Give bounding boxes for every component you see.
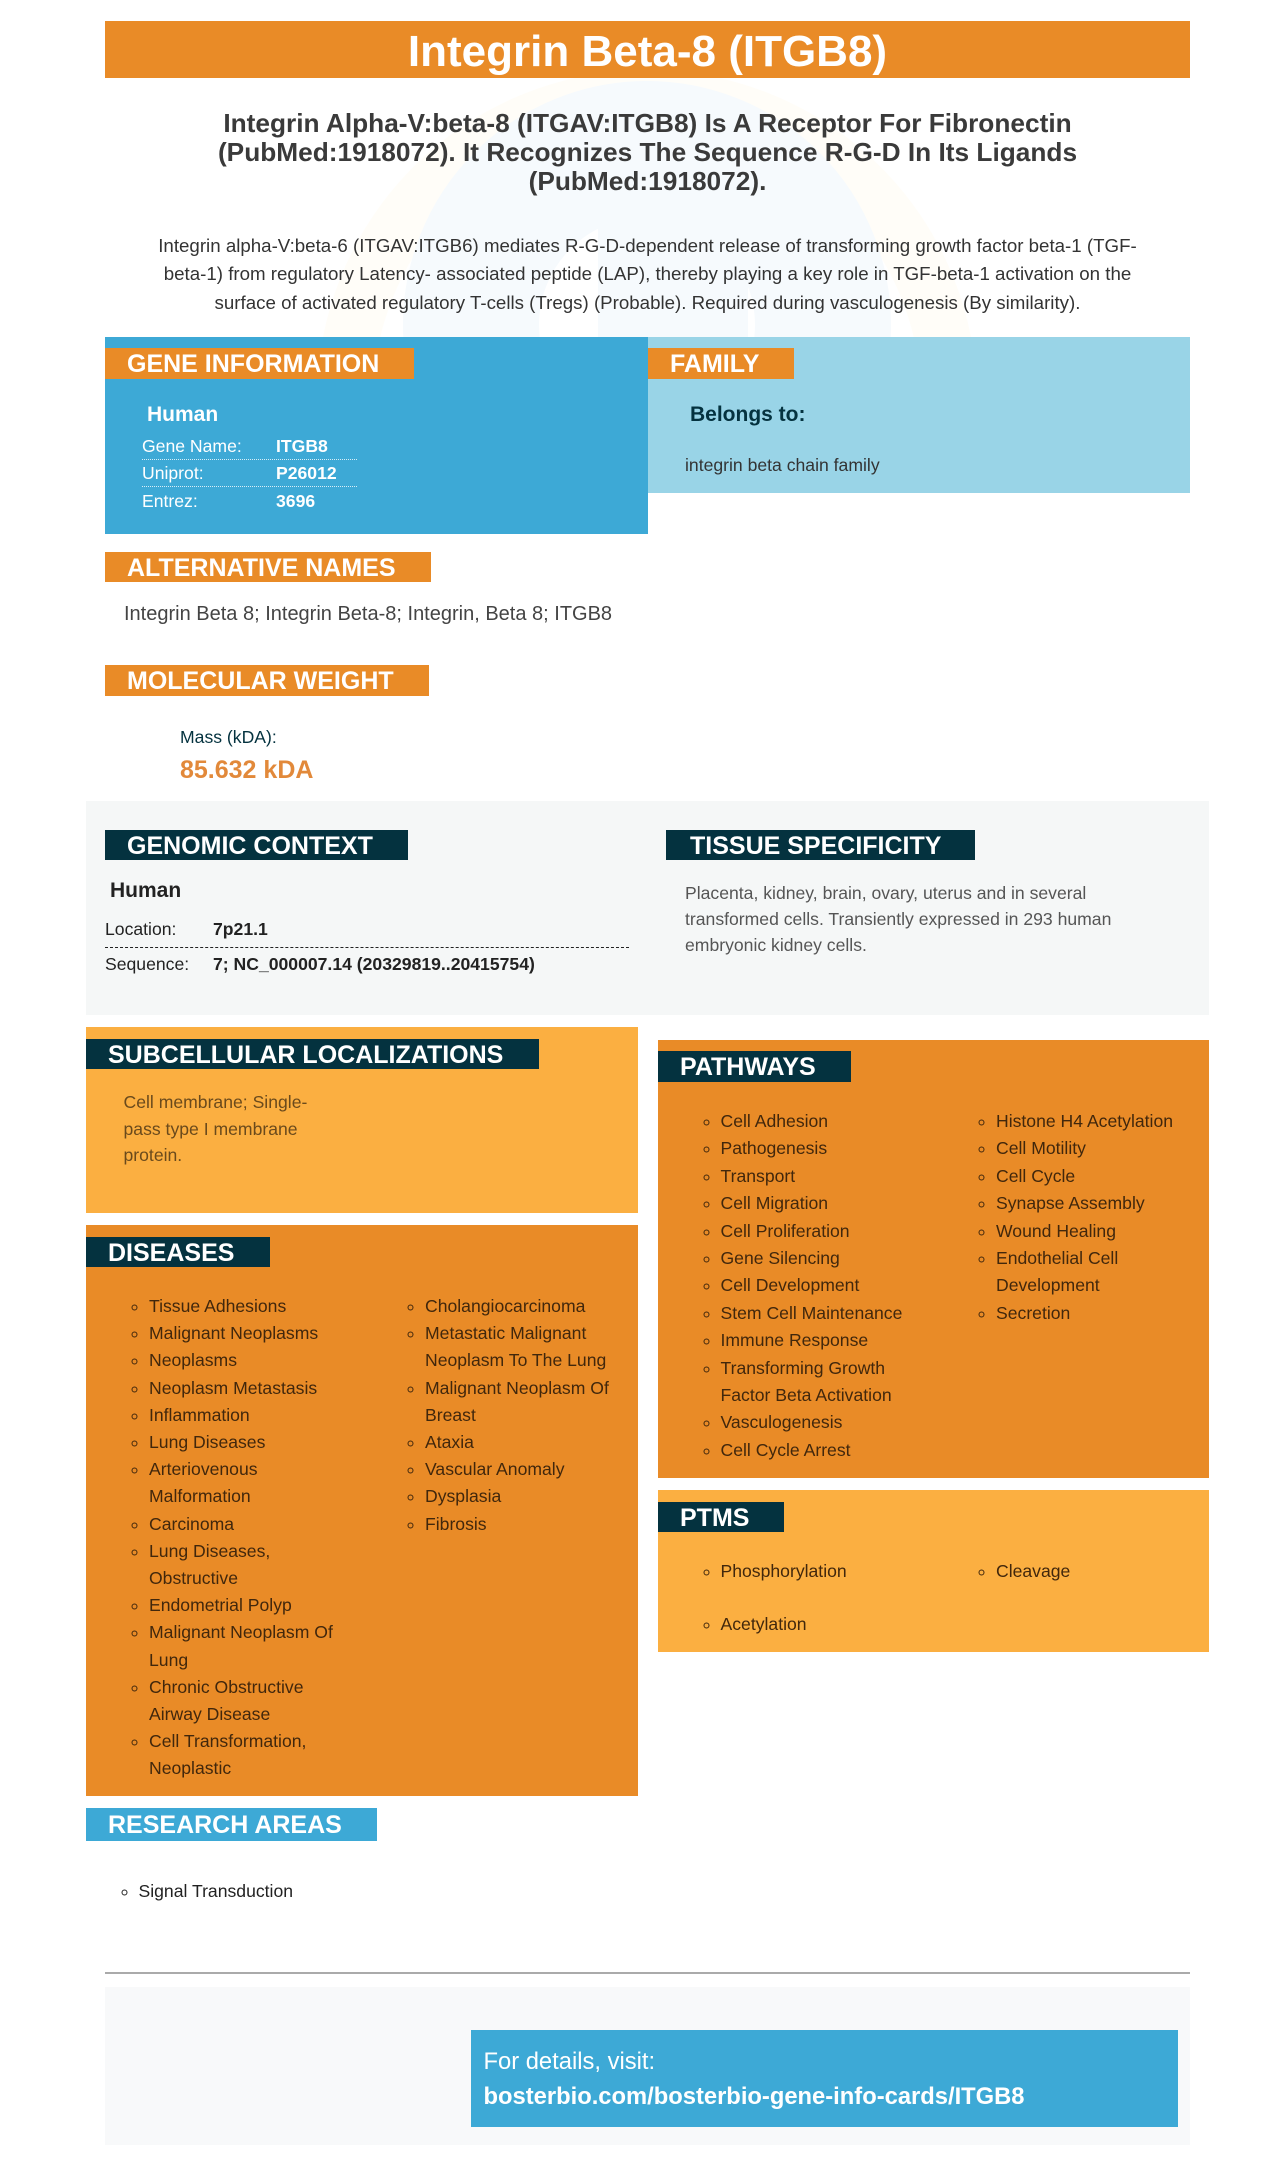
pathways list column 1: Cell Cycle Arrest [720,1440,851,1460]
diseases list column 2: Metastatic Malignant [425,1323,586,1343]
panel: ptms [658,1490,1209,1652]
subcellular text [124,1092,307,1165]
diseases list column 2: Cholangiocarcinoma [425,1296,585,1316]
background watermark logo [403,81,891,337]
panel: alternative names [105,552,612,625]
subtitle heading [218,108,1077,196]
pathways list column 1: Transport [720,1166,795,1186]
diseases list column 1: Obstructive [149,1568,238,1588]
sequence row: Sequence: [105,954,189,974]
pathways list column 1: Cell Proliferation [720,1221,850,1241]
title banner: Integrin Beta-8 (ITGB8) [408,27,887,76]
diseases list column 1: Neoplasms [149,1350,237,1370]
pathways list column 2: Endothelial Cell [996,1248,1118,1268]
heading: genomic context: GENOMIC CONTEXT [127,832,373,860]
heading: molecular weight: MOLECULAR WEIGHT [127,667,394,695]
diseases list column 1: Malformation [149,1486,251,1506]
species label: Human [110,879,181,902]
heading: ptms: PTMS [680,1504,749,1532]
diseases list column 1: Carcinoma [149,1514,234,1534]
pathways list column 1: Cell Adhesion [720,1111,828,1131]
diseases list column 2: Fibrosis [425,1514,487,1534]
pathways list column 1: Cell Migration [720,1193,828,1213]
panel: family [648,337,1190,493]
heading: diseases [86,1237,270,1267]
subcellular text: pass type I membrane [124,1119,298,1139]
pathways list column 1: Pathogenesis [720,1138,827,1158]
title banner [105,21,1190,78]
diseases list column 1: Chronic Obstructive [149,1677,304,1697]
diseases list column 1: Arteriovenous [149,1459,258,1479]
diseases list column 2 [408,1296,609,1534]
pathways list column 1: Gene Silencing [720,1248,840,1268]
panel: diseases [86,1225,638,1796]
sequence row: 7; NC_000007.14 (20329819..20415754) [213,954,535,974]
panel: molecular weight [105,665,429,784]
panel: pathways [658,1040,1209,1478]
pathways list column 2: Histone H4 Acetylation [996,1111,1173,1131]
tissue specificity text: embryonic kidney cells. [685,935,867,955]
belongs to label: Belongs to: [690,403,806,426]
tissue specificity text: Placenta, kidney, brain, ovary, uterus and in several [685,883,1086,903]
heading: diseases: DISEASES [108,1239,234,1267]
gene name row: Gene Name: [142,436,242,456]
diseases list column 1: Lung Diseases, [149,1541,270,1561]
panel: research areas [86,1808,377,1901]
entrez row: 3696 [276,491,315,511]
entrez row: Entrez: [142,491,198,511]
research areas list: Signal Transduction [138,1881,293,1901]
heading: research areas [86,1808,377,1841]
diseases list column 2: Malignant Neoplasm Of [425,1378,609,1398]
diseases list column 2: Ataxia [425,1432,474,1452]
description text: Integrin alpha-V:beta-6 (ITGAV:ITGB6) mediates R-G-D-dependent release of transforming growth factor beta-1 (TGF- [158,234,1137,256]
subtitle heading: (PubMed:1918072). It Recognizes The Sequence R-G-D In Its Ligands [218,136,1077,166]
pathways list column 2: Secretion [996,1303,1070,1323]
pathways list column 2: Wound Healing [996,1221,1116,1241]
location row: Location: [105,919,176,939]
ptm: cleavage: Cleavage [996,1561,1070,1581]
diseases list column 1: Endometrial Polyp [149,1595,292,1615]
diseases list column 1: Lung [149,1650,188,1670]
family name: integrin beta chain family [685,455,880,475]
callout link: bosterbio.com/bosterbio-gene-info-cards/ITGB8 [484,2083,1025,2110]
ptm: acetylation: Acetylation [720,1614,807,1634]
uniprot row: Uniprot: [142,463,204,483]
description text: beta-1) from regulatory Latency- associated peptide (LAP), thereby playing a key role in TGF-beta-1 activation on the [164,263,1131,284]
panel: gene information [105,337,648,534]
heading: family [648,348,794,379]
entrez row [142,491,315,511]
pathways list column 1: Stem Cell Maintenance [720,1303,902,1323]
pathways list column 1: Immune Response [720,1330,868,1350]
footer panel [105,1987,1190,2145]
pathways list column 1: Vasculogenesis [720,1412,842,1432]
diseases list column 2: Vascular Anomaly [425,1459,565,1479]
diseases list column 1: Inflammation [149,1405,250,1425]
pathways list column 1 [704,1111,902,1460]
subcellular text: protein. [124,1145,182,1165]
diseases list column 2: Dysplasia [425,1486,501,1506]
heading: family: FAMILY [670,350,759,378]
species label: Human [147,403,218,426]
diseases list column 1 [132,1296,333,1778]
description text: surface of activated regulatory T-cells (Tregs) (Probable). Required during vasculogenesis (By similarity). [215,292,1080,313]
diseases list column 1: Neoplasm Metastasis [149,1378,317,1398]
mass label: Mass (kDA): [180,727,277,747]
heading: research areas: RESEARCH AREAS [108,1811,342,1839]
diseases list column 2: Neoplasm To The Lung [425,1350,606,1370]
diseases list column 1: Cell Transformation, [149,1731,306,1751]
pathways list column 1: Transforming Growth [720,1358,885,1378]
uniprot row [142,462,357,487]
heading: pathways [658,1051,851,1082]
heading: alternative names: ALTERNATIVE NAMES [127,554,396,582]
diseases list column 1: Tissue Adhesions [149,1296,286,1316]
heading: pathways: PATHWAYS [680,1053,816,1081]
gene name row: ITGB8 [276,436,328,456]
mass value: 85.632 kDA [180,756,313,784]
location row: 7p21.1 [213,919,268,939]
subcellular text: Cell membrane; Single- [124,1092,307,1112]
diseases list column 1: Lung Diseases [149,1432,265,1452]
description text [158,234,1137,313]
pathways list column 2: Cell Motility [996,1138,1086,1158]
alternative names text: Integrin Beta 8; Integrin Beta-8; Integrin, Beta 8; ITGB8 [124,603,612,625]
tissue specificity text: transformed cells. Transiently expressed in 293 human [685,909,1111,929]
pathways list column 2: Development [996,1275,1100,1295]
callout label: For details, visit: [484,2048,655,2074]
footer callout [471,2030,1178,2127]
ptm: phosphorylation: Phosphorylation [720,1561,847,1581]
subtitle heading: (PubMed:1918072). [529,166,766,196]
tissue specificity text [685,883,1111,955]
panel: subcellular localizations [86,1027,638,1213]
subtitle heading: Integrin Alpha-V:beta-8 (ITGAV:ITGB8) Is A Receptor For Fibronectin [223,108,1072,138]
panel: genomic context and tissue specificity [86,801,1209,1015]
diseases list column 1: Neoplastic [149,1758,231,1778]
pathways list column 1: Cell Development [720,1275,859,1295]
gene name row [142,435,357,460]
diseases list column 1: Malignant Neoplasms [149,1323,318,1343]
pathways list column 2 [978,1111,1173,1323]
pathways list column 2: Cell Cycle [996,1166,1075,1186]
heading: gene information: GENE INFORMATION [127,350,379,378]
pathways list column 2: Synapse Assembly [996,1193,1145,1213]
heading: subcellular localizations: SUBCELLULAR LOCALIZATIONS [108,1041,503,1069]
diseases list column 2: Breast [425,1405,476,1425]
uniprot row: P26012 [276,463,337,483]
diseases list column 1: Malignant Neoplasm Of [149,1622,333,1642]
heading: tissue specificity: TISSUE SPECIFICITY [690,832,941,860]
heading: ptms [658,1502,784,1532]
location row [105,918,629,948]
pathways list column 1: Factor Beta Activation [720,1385,892,1405]
diseases list column 1: Airway Disease [149,1704,270,1724]
